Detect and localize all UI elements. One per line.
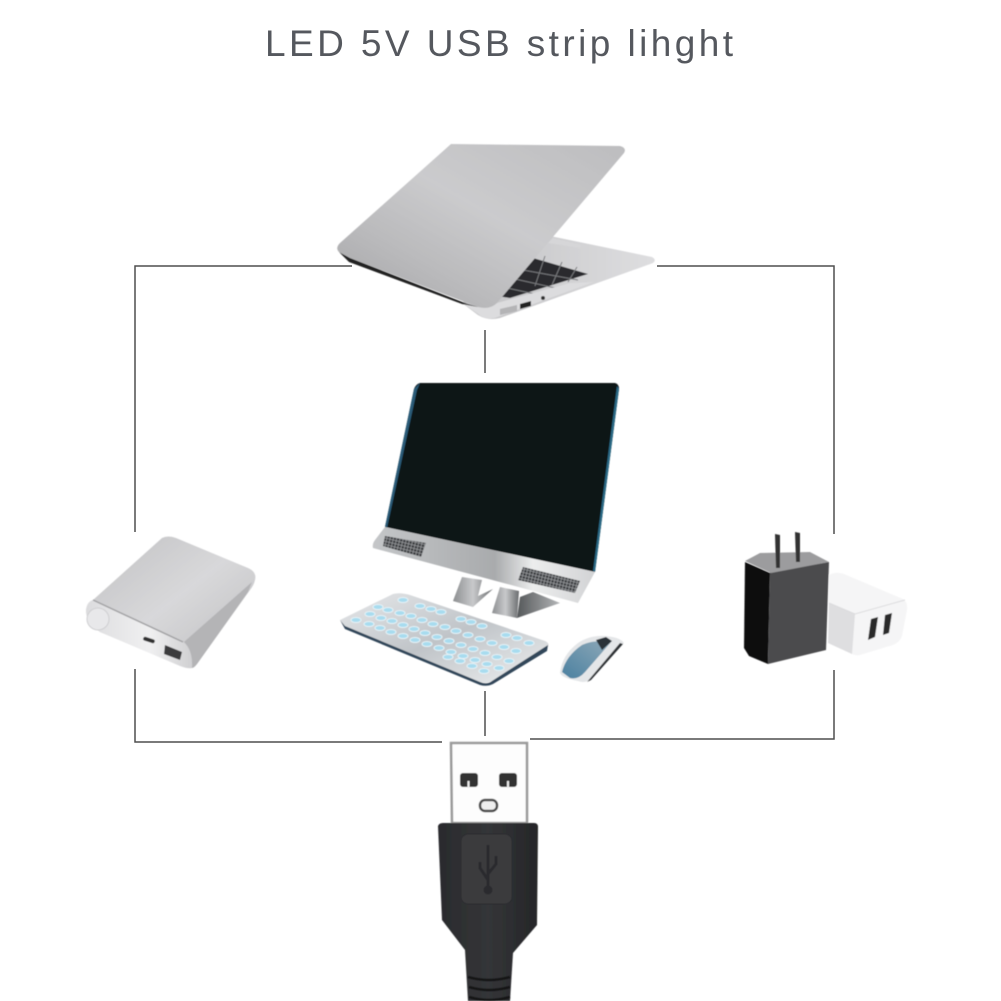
- usb port: [164, 645, 182, 660]
- laptop ports edge: [462, 282, 594, 318]
- speaker left: [383, 536, 426, 557]
- usb trident: [480, 845, 496, 892]
- speaker right: [518, 567, 580, 593]
- black charger: [744, 562, 770, 664]
- laptop lid: [337, 144, 625, 308]
- power bank side: [184, 582, 252, 668]
- icon: chargers: [744, 532, 907, 664]
- connector lines: [135, 266, 834, 742]
- icon: laptop: [337, 144, 655, 319]
- micro usb port: [143, 636, 155, 644]
- icon: usb plug: [438, 743, 538, 1001]
- power bank top: [86, 536, 255, 668]
- keyboard: [340, 593, 549, 683]
- white charger: [828, 573, 907, 655]
- mouse: [560, 636, 624, 682]
- title: LED 5V USB strip lihght: [265, 23, 734, 64]
- usb metal shell: [451, 743, 527, 823]
- monitor screen: [385, 383, 619, 572]
- cable ribs: [468, 977, 510, 1000]
- laptop base: [462, 236, 655, 319]
- plug body and cable: [438, 823, 538, 1001]
- icon: power bank: [86, 536, 255, 668]
- keyboard keys: [351, 598, 534, 674]
- icon: desktop computer: [340, 383, 624, 686]
- prongs: [775, 534, 780, 568]
- contact slots: [460, 773, 478, 787]
- monitor chin: [373, 527, 595, 603]
- power bank front: [86, 600, 192, 668]
- laptop keyboard: [497, 258, 588, 298]
- usb logo recess: [461, 834, 512, 904]
- power button: [87, 608, 109, 630]
- monitor stand: [453, 577, 493, 607]
- usb ports: [868, 617, 878, 640]
